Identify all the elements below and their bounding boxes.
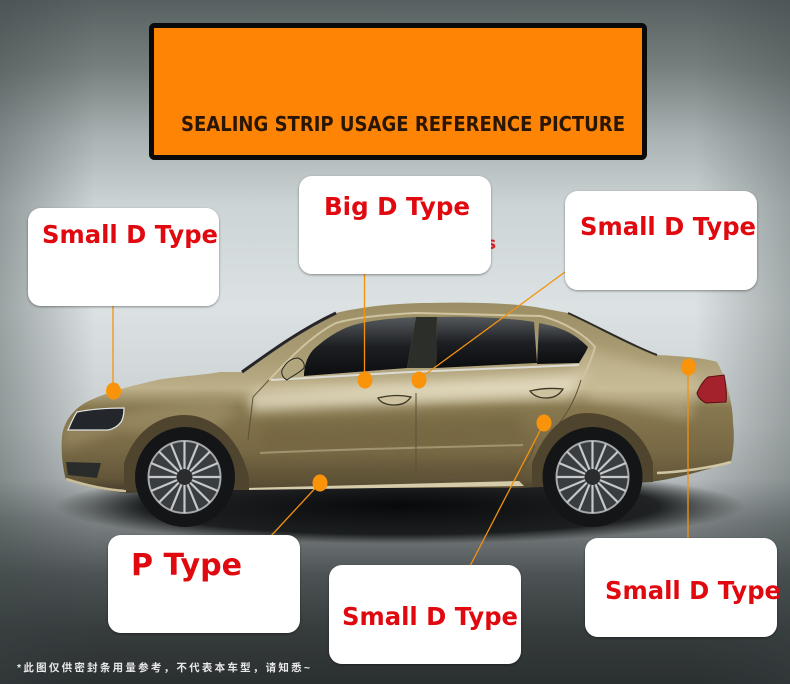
ground shadow [55, 468, 745, 544]
callout: P type: P Type [131, 548, 242, 583]
callout: small D type, top right: Small D Type [580, 212, 756, 241]
front fog lamp [66, 462, 101, 478]
car illustration [62, 303, 734, 527]
car body [62, 303, 734, 493]
title text: SEALING STRIP USAGE REFERENCE PICTURE [181, 112, 625, 136]
side windows [271, 317, 588, 380]
callout: big D type: Big D Type [324, 192, 470, 221]
callout: small D type, bottom centre: Small D Type [342, 602, 518, 631]
rear bumper strip [657, 462, 731, 473]
callout: small D type, top right [565, 191, 757, 290]
front wheel [124, 415, 249, 527]
front bumper strip [66, 479, 126, 491]
callout: small D type, bottom right [585, 538, 781, 637]
stray red letter behind callout: s [486, 234, 496, 254]
marker dots [106, 358, 696, 492]
tail light [697, 375, 726, 403]
callout: small D type, top left: Small D Type [42, 220, 218, 249]
callout: small D type, bottom centre [329, 565, 521, 664]
title banner [152, 26, 644, 158]
headlight [68, 408, 124, 430]
body shading [62, 346, 698, 454]
callout: small D type, top left [28, 208, 219, 306]
roof dark trim [242, 313, 336, 372]
door seams [248, 380, 581, 482]
rear wheel [532, 413, 653, 527]
callout: small D type, bottom right: Small D Type [605, 576, 781, 605]
door handles [378, 388, 563, 405]
callout: big D type [299, 176, 491, 274]
window frame arch [269, 313, 595, 380]
callout: P type [108, 535, 300, 633]
leader lines [113, 270, 688, 566]
side mirror [282, 358, 304, 380]
footnote: *此图仅供密封条用量参考，不代表本车型，请知悉~ [17, 661, 310, 674]
sill trim [246, 481, 524, 490]
